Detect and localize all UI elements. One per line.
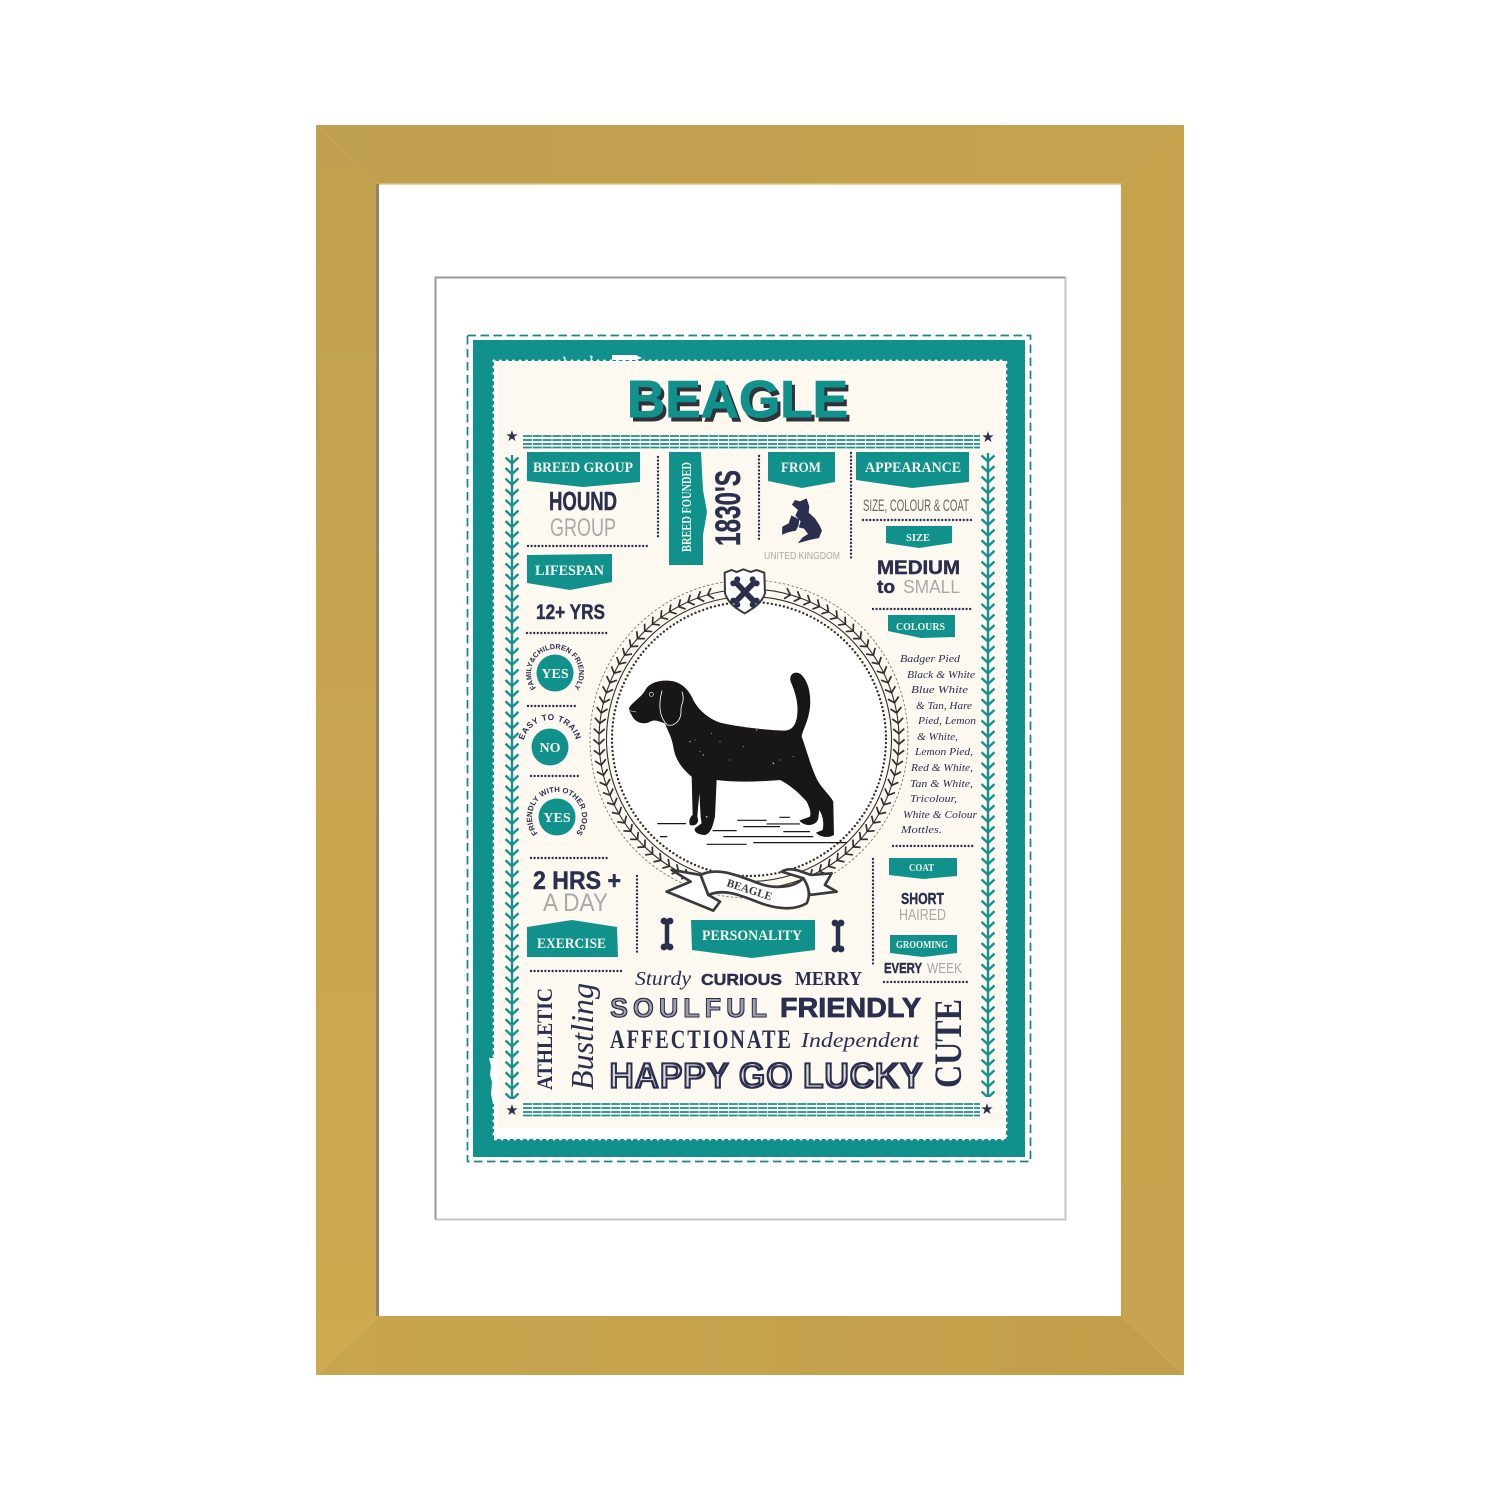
personality word cloud: Independent xyxy=(800,1028,920,1052)
panel: breed founded xyxy=(669,452,748,565)
icon: UK map xyxy=(782,498,822,543)
panel: grooming xyxy=(884,935,962,977)
icon: bone right xyxy=(832,920,844,952)
panel: breed founded: 1830'S xyxy=(709,470,748,546)
badge: friendly with other dogs: FRIENDLY WITH OTHER DOGS xyxy=(526,786,588,836)
dog emblem: BEAGLE xyxy=(725,877,774,903)
panel: lifespan: 12+ YRS xyxy=(536,601,605,624)
top triple rule and stars xyxy=(505,427,995,448)
badge: easy to train: NO xyxy=(540,741,561,756)
poster xyxy=(466,334,1032,1162)
cream paper panel xyxy=(489,355,1006,1139)
panel: colours: White & Colour xyxy=(903,809,978,821)
panel: colours: COLOURS xyxy=(896,622,945,633)
panel: colours: Tan & White, xyxy=(910,778,973,790)
title: BEAGLE xyxy=(630,375,851,433)
panel: grooming: WEEK xyxy=(927,960,962,977)
personality word cloud: MERRY xyxy=(795,968,862,990)
panel: exercise: A DAY xyxy=(543,889,608,917)
inner white medallion xyxy=(612,602,886,876)
panel: breed group: HOUND xyxy=(549,486,617,516)
panel: personality ribbon xyxy=(691,920,815,958)
panel: colours xyxy=(888,615,978,836)
panel: colours: Tricolour, xyxy=(910,793,957,805)
ground hatching xyxy=(657,817,847,844)
panel: colours: Pied, Lemon xyxy=(917,715,977,727)
bottom triple rule and stars xyxy=(505,1100,994,1119)
panel: coat xyxy=(889,858,957,924)
panel: breed group: BREED GROUP xyxy=(533,460,633,476)
wreath rings xyxy=(590,580,908,898)
teal border xyxy=(473,340,1025,1157)
bottom triple rule and stars: ★ xyxy=(505,1101,519,1119)
panel: colours: Badger Pied xyxy=(900,653,961,665)
personality word cloud: HAPPY GO LUCKY xyxy=(609,1055,923,1096)
panel: appearance xyxy=(856,452,969,515)
badge: easy to train: EASY TO TRAIN xyxy=(518,714,582,740)
panel: exercise: 2 HRS + xyxy=(533,867,621,895)
icon: bone left xyxy=(661,918,673,950)
badge: family and children friendly: YES xyxy=(541,667,569,682)
personality word cloud: AFFECTIONATE xyxy=(610,1026,791,1055)
panel: lifespan: LIFESPAN xyxy=(535,563,605,579)
personality word cloud: CUTE xyxy=(927,999,970,1088)
personality word cloud: FRIENDLY xyxy=(780,992,921,1023)
title: BEAGLE xyxy=(627,371,848,429)
white mat with bevelled opening xyxy=(379,185,1121,1316)
panel: colours: Blue White xyxy=(911,684,968,696)
wreath leaves xyxy=(576,588,922,894)
panel: lifespan xyxy=(527,554,612,624)
badge: easy to train xyxy=(518,714,582,766)
right vine border xyxy=(980,453,996,1097)
panel: appearance: APPEARANCE xyxy=(865,460,961,476)
panel: coat: HAIRED xyxy=(899,907,946,924)
personality word cloud: CURIOUS xyxy=(701,972,782,989)
top triple rule and stars: ★ xyxy=(505,427,519,445)
left vine border xyxy=(504,455,520,1099)
badge: family and children friendly: FAMILY&CHILDREN FRIENDLY xyxy=(526,644,584,690)
panel: breed group: GROUP xyxy=(550,514,616,542)
top triple rule and stars: ★ xyxy=(981,428,995,446)
personality word cloud: SOULFUL xyxy=(610,993,767,1023)
panel: coat: COAT xyxy=(909,863,934,874)
dog silhouette xyxy=(629,673,847,844)
panel: grooming: EVERY xyxy=(884,960,922,977)
badge: friendly with other dogs: YES xyxy=(543,811,571,826)
gold picture frame xyxy=(316,125,1184,1375)
panel: size: to xyxy=(877,577,895,597)
panel: breed group xyxy=(527,452,640,542)
panel: colours: & Tan, Hare xyxy=(916,700,972,712)
panel: size: SIZE xyxy=(906,533,930,544)
personality word cloud: Bustling xyxy=(564,983,600,1090)
ribbon banner xyxy=(667,869,837,911)
panel: exercise: EXERCISE xyxy=(537,936,606,952)
panel: from: UNITED KINGDOM xyxy=(764,551,840,562)
personality word cloud: ATHLETIC xyxy=(532,988,557,1090)
panel: colours: Red & White, xyxy=(910,762,973,774)
panel: colours: Lemon Pied, xyxy=(914,746,973,758)
panel: exercise xyxy=(527,867,621,957)
panel: from xyxy=(764,452,840,562)
panel: breed founded: BREED FOUNDED xyxy=(679,462,694,552)
bottom triple rule and stars: ★ xyxy=(980,1100,994,1118)
personality word cloud xyxy=(532,968,970,1096)
panel: colours: Mottles. xyxy=(900,824,942,836)
panel: from: FROM xyxy=(781,460,821,476)
dashed outer border xyxy=(468,336,1030,1162)
dog emblem xyxy=(576,569,922,911)
personality word cloud: Sturdy xyxy=(635,968,691,990)
panel: colours: Black & White xyxy=(907,669,975,681)
panel: appearance: SIZE, COLOUR & COAT xyxy=(863,496,969,515)
shield with crossed bones xyxy=(725,569,765,613)
panel: size: MEDIUM xyxy=(877,558,960,579)
panel: size xyxy=(877,526,960,597)
panel: colours: & White, xyxy=(917,731,958,743)
panel: personality ribbon: PERSONALITY xyxy=(702,928,802,944)
panel: grooming: GROOMING xyxy=(896,940,948,951)
panel: coat: SHORT xyxy=(901,891,944,908)
panel: size: SMALL xyxy=(903,577,960,597)
